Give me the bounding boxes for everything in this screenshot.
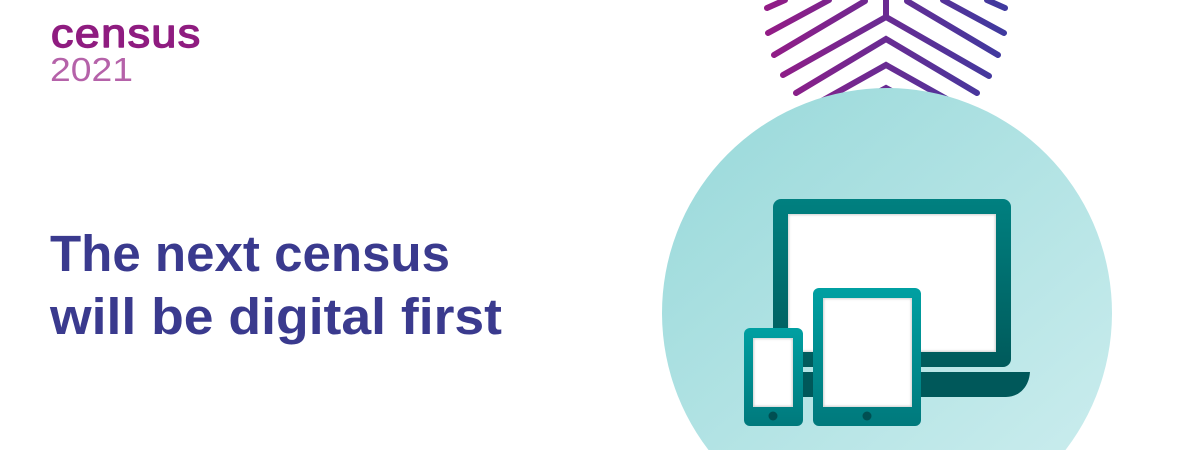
logo word: census: census [51, 11, 202, 55]
title line 1: The next census [50, 225, 450, 282]
icon: phone [744, 328, 803, 426]
laptop base [790, 372, 1030, 397]
laptop screen [788, 214, 996, 352]
logo year: 2021: 2021 [50, 51, 133, 88]
tablet body [813, 288, 921, 426]
laptop screen shadow [788, 214, 996, 352]
teal circle background [662, 88, 1112, 450]
tablet screen [823, 298, 912, 407]
logo: census 2021 [50, 11, 202, 88]
title line 2: will be digital first [49, 288, 502, 345]
icon: tablet [813, 288, 921, 426]
tablet button [862, 412, 872, 420]
icon: laptop [773, 199, 1030, 397]
laptop lid [773, 199, 1011, 367]
phone screen shadow [753, 338, 793, 407]
phone screen [753, 338, 793, 407]
phone button [768, 412, 778, 420]
phone body [744, 328, 803, 426]
chevron pattern [767, 0, 1005, 102]
title [49, 225, 502, 345]
tablet screen shadow [823, 298, 912, 407]
